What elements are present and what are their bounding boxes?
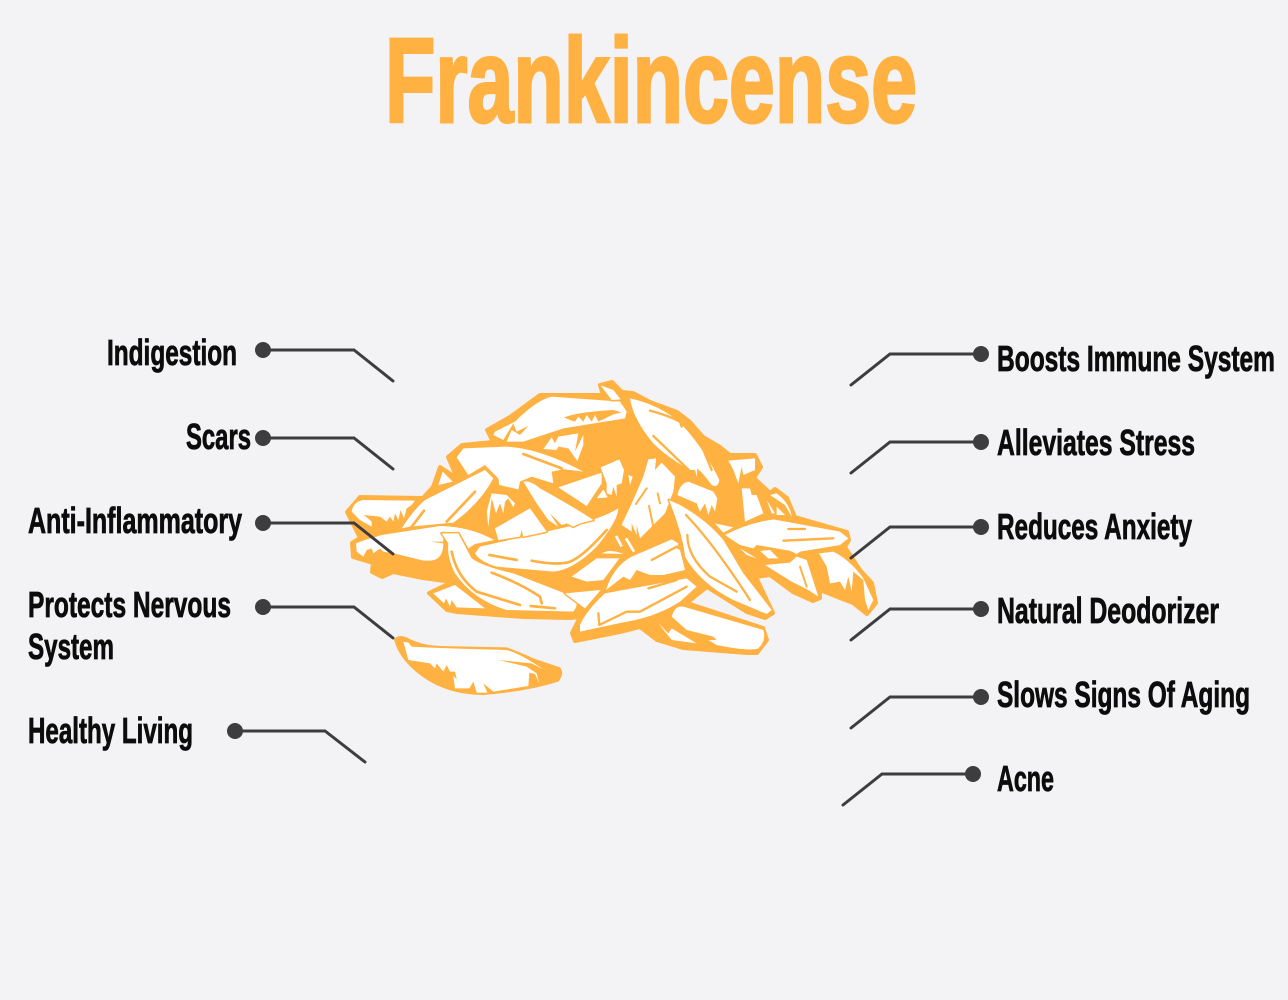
- callout: Anti-Inflammatory: Anti-Inflammatory: [28, 500, 242, 541]
- callout: Slows Signs Of Aging: [851, 674, 1250, 728]
- upper and centre grains: [493, 385, 719, 632]
- callout: Scars: Scars: [186, 416, 251, 457]
- right-side grains: [658, 458, 873, 649]
- callout: Acne: Acne: [997, 758, 1054, 799]
- callout: Protects Nervous System: System: [28, 626, 114, 667]
- left-side grains: [352, 447, 618, 612]
- left callouts: [28, 332, 393, 762]
- callout: Indigestion: Indigestion: [107, 332, 237, 373]
- pile silhouette: [347, 382, 876, 653]
- callout: Healthy Living: [28, 710, 365, 762]
- callout: Scars: [186, 416, 393, 469]
- callout: Alleviates Stress: [851, 422, 1195, 473]
- callout: Natural Deodorizer: [851, 590, 1219, 640]
- callout: Reduces Anxiety: Reduces Anxiety: [997, 506, 1192, 547]
- callout: Protects Nervous System: Protects Nervous: [28, 584, 231, 625]
- callout: Anti-Inflammatory: [28, 500, 393, 554]
- callout: Acne: [843, 758, 1054, 805]
- callout: Healthy Living: Healthy Living: [28, 710, 193, 751]
- callout: Reduces Anxiety: [851, 506, 1192, 558]
- title: Frankincense: [385, 14, 917, 148]
- callout: Alleviates Stress: Alleviates Stress: [997, 422, 1195, 463]
- illustration: frankincense resin pile: [347, 382, 876, 695]
- callout: Indigestion: [107, 332, 393, 381]
- callout: Protects Nervous System: [28, 584, 393, 667]
- callout: Boosts Immune System: [851, 338, 1275, 385]
- separate lower grain: [394, 636, 562, 695]
- right callouts: [843, 338, 1275, 805]
